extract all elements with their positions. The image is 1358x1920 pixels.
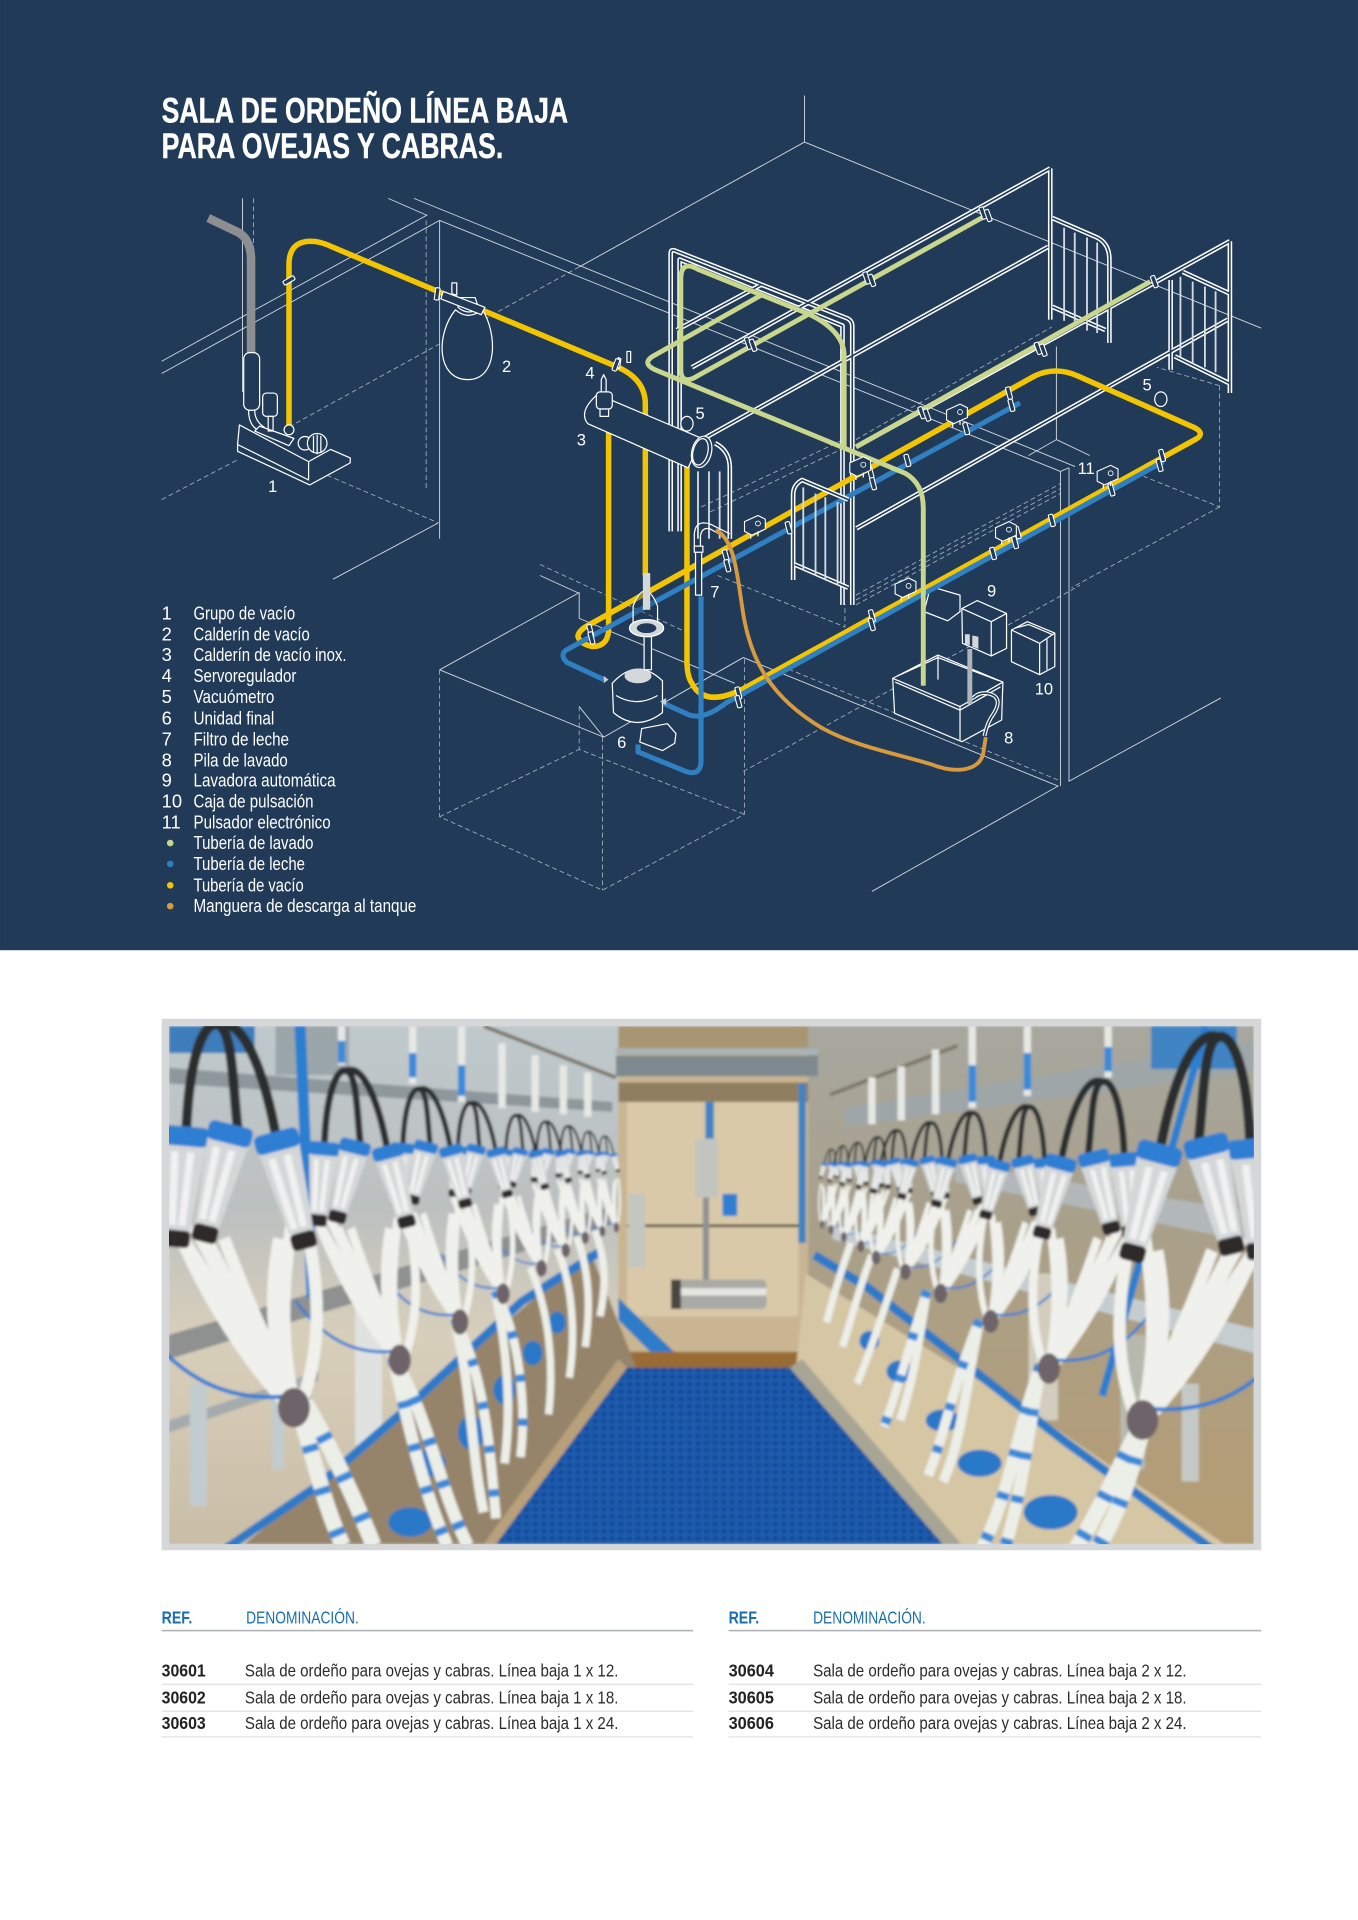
diagram number labels: 6 [617, 733, 626, 752]
building wireframe [162, 96, 1261, 891]
table: references left: REF. [162, 1608, 192, 1628]
legend: Servoregulador [193, 665, 296, 686]
item 8: wash tub [893, 649, 1003, 742]
table: references right: 30605 [729, 1687, 774, 1707]
legend: 8 [162, 750, 172, 771]
vacuum pipe (yellow) [289, 241, 1200, 697]
table: references left: Sala de ordeño para ovejas y cabras. Línea baja 1 x 12. [245, 1660, 618, 1680]
legend: 6 [162, 707, 172, 728]
item 5: vacuum gauges [681, 392, 1167, 431]
table: references left: Sala de ordeño para ovejas y cabras. Línea baja 1 x 18. [245, 1687, 618, 1707]
item 4: servo regulator [596, 351, 631, 416]
diagram number labels: 5 [696, 404, 705, 423]
legend: Manguera de descarga al tanque [193, 895, 416, 916]
legend: 2 [162, 623, 172, 644]
photo: milking parlour interior [145, 1019, 1292, 1550]
legend: Caja de pulsación [193, 791, 313, 812]
table: references left: 30603 [162, 1713, 206, 1733]
title [162, 90, 568, 166]
item 9: automatic washer [962, 601, 1007, 656]
legend: Pulsador electrónico [193, 811, 331, 832]
diagram number labels: 10 [1035, 679, 1053, 698]
pipe clamps [283, 207, 1166, 708]
table: references left: Sala de ordeño para ovejas y cabras. Línea baja 1 x 24. [245, 1713, 618, 1733]
legend: Vacuómetro [193, 686, 274, 707]
legend: Calderín de vacío [193, 623, 310, 644]
legend: 1 [162, 603, 172, 624]
diagram number labels: 5 [1142, 376, 1152, 395]
table: references left [162, 1607, 693, 1738]
diagram number labels: 8 [1004, 728, 1013, 747]
exhaust pipe [208, 218, 251, 353]
title: PARA OVEJAS Y CABRAS. [162, 127, 503, 166]
item 10: pulsation box [1011, 622, 1055, 675]
legend: Tubería de vacío [193, 874, 304, 895]
legend: 4 [162, 665, 172, 686]
table: references right: REF. [729, 1608, 759, 1628]
diagram number labels: 1 [268, 477, 277, 496]
item 7: milk filter [694, 523, 730, 595]
table: references right [729, 1607, 1261, 1738]
diagram number labels [268, 357, 1152, 752]
legend: 10 [162, 791, 182, 812]
diagram number labels: 11 [1078, 459, 1095, 478]
table: references left: 30601 [162, 1660, 206, 1680]
panel: milking parlour diagram [0, 0, 1358, 950]
diagram number labels: 4 [585, 363, 595, 382]
item 2: vacuum vessel [441, 283, 492, 380]
legend: 11 [162, 811, 181, 832]
table: references right: Sala de ordeño para ovejas y cabras. Línea baja 2 x 12. [813, 1660, 1187, 1680]
wash pipe (green) [648, 215, 1150, 686]
item 9: washer rear box [924, 587, 960, 621]
legend: Pila de lavado [193, 750, 288, 771]
diagram number labels: 7 [710, 583, 719, 602]
table: references right: Sala de ordeño para ovejas y cabras. Línea baja 2 x 18. [813, 1687, 1187, 1707]
table: references right: 30606 [729, 1713, 774, 1733]
diagram number labels: 2 [502, 357, 511, 376]
item 11: electronic pulsators [745, 404, 1118, 601]
legend: 7 [162, 729, 172, 750]
legend: 3 [162, 644, 172, 665]
legend: Filtro de leche [193, 729, 289, 750]
table: references left: DENOMINACIÓN. [246, 1607, 359, 1628]
item 1: vacuum unit [238, 353, 350, 485]
legend: Tubería de leche [193, 853, 305, 874]
table: references right: DENOMINACIÓN. [813, 1607, 926, 1628]
legend: 5 [162, 686, 172, 707]
legend: Grupo de vacío [193, 603, 295, 624]
legend: Calderín de vacío inox. [193, 644, 347, 665]
legend: Unidad final [193, 707, 274, 728]
discharge hose (orange) [716, 530, 986, 770]
title: SALA DE ORDEÑO LÍNEA BAJA [162, 90, 568, 130]
table: references left: 30602 [162, 1687, 206, 1707]
legend: Tubería de lavado [193, 832, 313, 853]
front gate [793, 480, 848, 588]
steel frames and rails [671, 168, 1230, 605]
item 6: final unit [604, 573, 676, 751]
milk pipe (blue) [563, 403, 1163, 773]
item 3: stainless vacuum tank [585, 394, 715, 470]
legend: 9 [162, 770, 172, 791]
legend [162, 603, 416, 916]
table: references right: 30604 [729, 1660, 774, 1680]
table: references right: Sala de ordeño para ovejas y cabras. Línea baja 2 x 24. [813, 1713, 1187, 1733]
diagram number labels: 9 [987, 581, 996, 600]
legend: Lavadora automática [193, 770, 336, 791]
diagram number labels: 3 [577, 431, 586, 450]
